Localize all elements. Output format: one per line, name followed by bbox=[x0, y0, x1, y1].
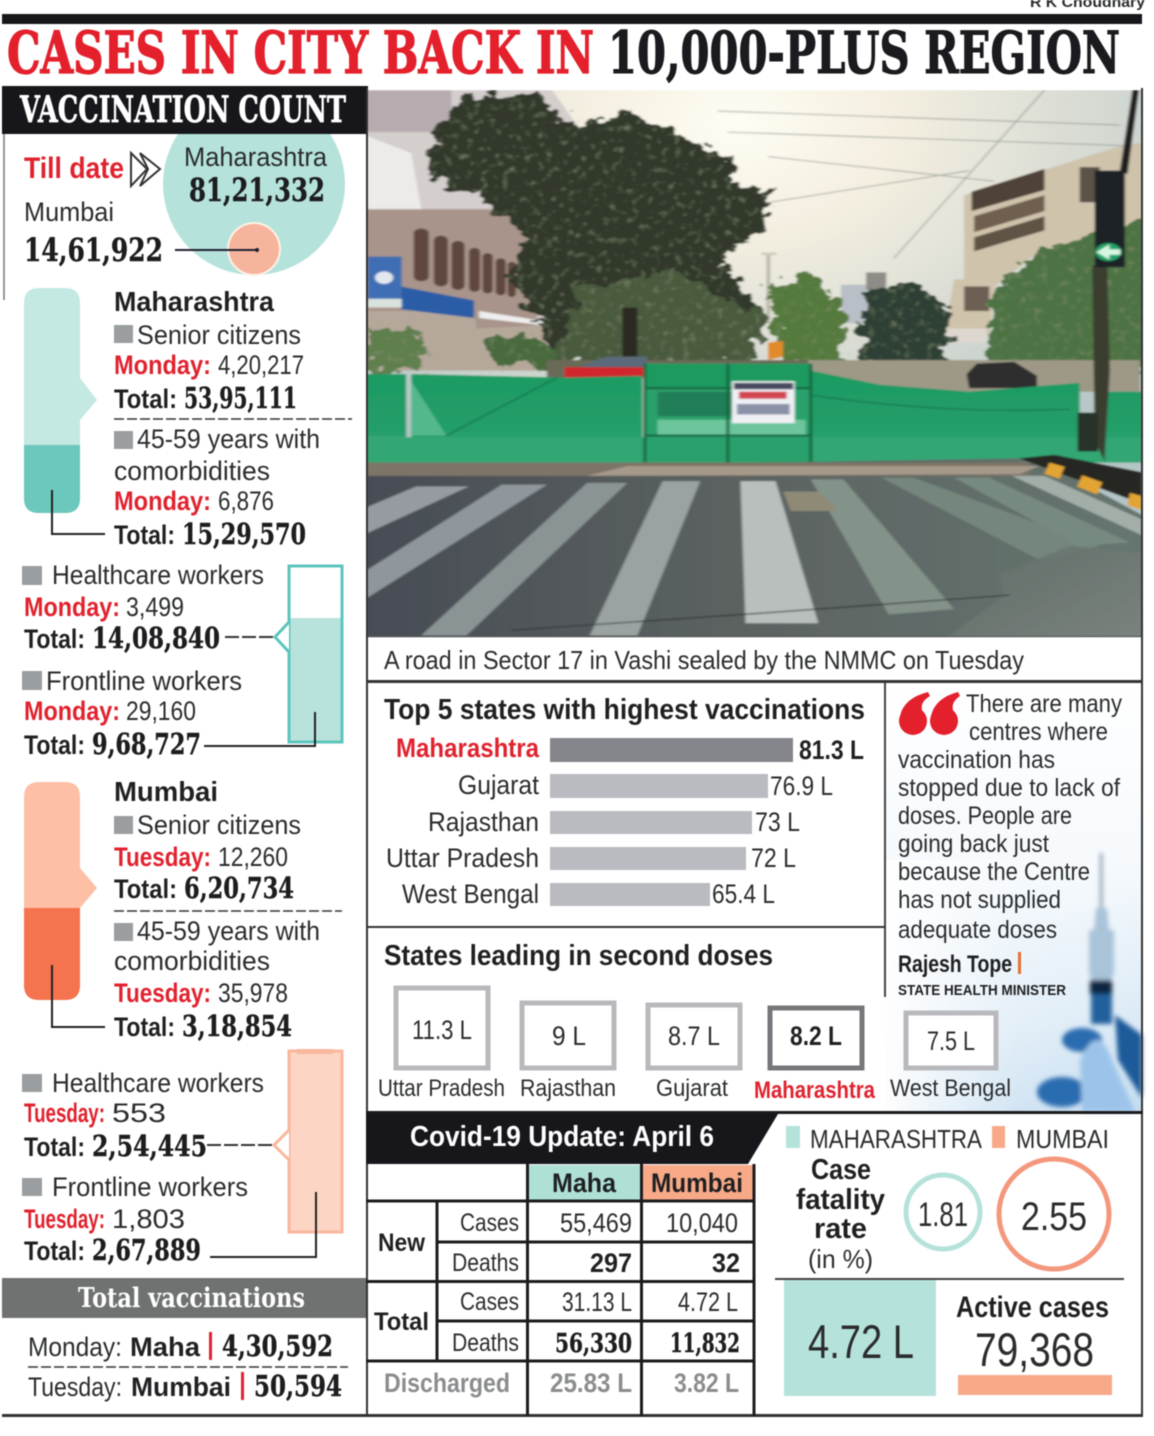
table: Covid-19 update: 11,832 bbox=[670, 1329, 740, 1359]
text: Mumbai workers bbox=[22, 1068, 264, 1267]
table: Covid-19 update: 55,469 bbox=[560, 1208, 632, 1238]
text: Mumbai workers: Healthcare workers bbox=[52, 1068, 264, 1098]
text: Maharashtra senior citizens and comorbidities bbox=[114, 286, 352, 551]
bubble chart: till date totals: Till date bbox=[24, 152, 124, 185]
bar chart: top 5 states: 65.4 L bbox=[712, 879, 775, 909]
total vaccinations: Total vaccinations bbox=[78, 1283, 305, 1314]
table: Covid-19 update: Maha bbox=[552, 1168, 617, 1198]
icon: quotation marks bbox=[899, 692, 960, 735]
table heading: Covid-19 Update: April 6 bbox=[410, 1121, 714, 1153]
text: Mumbai senior citizens and comorbidities: 35,978 bbox=[218, 978, 288, 1008]
table: Covid-19 update: Cases bbox=[460, 1288, 519, 1316]
table: Covid-19 update: Cases bbox=[460, 1209, 519, 1237]
text: Maharashtra senior citizens and comorbidities: 53,95,111 bbox=[184, 381, 297, 415]
bar chart: top 5 states: 76.9 L bbox=[770, 771, 833, 801]
total vaccinations bbox=[2, 1278, 366, 1403]
bar chart: top 5 states: Uttar Pradesh bbox=[386, 843, 539, 873]
table: Covid-19 update: 25.83 L bbox=[550, 1368, 632, 1398]
quote: vaccination has bbox=[898, 746, 1055, 774]
title: CASES IN CITY BACK IN bbox=[7, 19, 594, 87]
heading: vaccination count bbox=[2, 86, 368, 134]
text: Mumbai senior citizens and comorbidities: Mumbai bbox=[114, 776, 218, 807]
text: Maharashtra senior citizens and comorbidities: Senior citizens bbox=[137, 320, 301, 350]
text: Mumbai senior citizens and comorbidities: Senior citizens bbox=[137, 810, 301, 840]
chart: states leading in second doses: Rajasthan bbox=[520, 1075, 616, 1102]
text: Mumbai senior citizens and comorbidities: 12,260 bbox=[218, 842, 288, 872]
chart: states leading in second doses: 8.2 L bbox=[790, 1021, 842, 1051]
bubble chart: till date totals: 81,21,332 bbox=[189, 171, 325, 209]
text: Maharashtra workers: 3,499 bbox=[126, 592, 184, 622]
total vaccinations: Maha bbox=[130, 1332, 201, 1362]
bar chart: top 5 states: 72 L bbox=[751, 843, 796, 873]
text: Maharashtra senior citizens and comorbidities: Maharashtra bbox=[114, 286, 274, 317]
quote: STATE HEALTH MINISTER bbox=[898, 982, 1066, 999]
table: Covid-19 update: 32 bbox=[712, 1248, 740, 1278]
table: Covid-19 update: 56,330 bbox=[555, 1329, 632, 1359]
table: Covid-19 update bbox=[366, 1114, 778, 1416]
case fatality rate: 1.81 bbox=[918, 1196, 968, 1234]
table: Covid-19 update: 4.72 L bbox=[678, 1287, 738, 1317]
text: Maharashtra senior citizens and comorbidities: 45-59 years with bbox=[137, 424, 320, 454]
text: Maharashtra workers: Monday: bbox=[24, 696, 120, 726]
text: Mumbai workers: Tuesday: bbox=[24, 1204, 105, 1234]
table: Covid-19 update: Discharged bbox=[384, 1368, 510, 1398]
text: Maharashtra senior citizens and comorbidities: Total: bbox=[114, 384, 177, 414]
text: Mumbai workers: Total: bbox=[24, 1236, 85, 1266]
text: Maharashtra workers: Healthcare workers bbox=[52, 560, 264, 590]
text: Maharashtra workers: Total: bbox=[24, 624, 85, 654]
chart: states leading in second doses: 8.7 L bbox=[668, 1021, 720, 1051]
active cases bbox=[784, 1280, 1112, 1396]
legend bbox=[786, 1124, 1109, 1154]
text: Maharashtra workers bbox=[22, 560, 264, 761]
total vaccinations: Tuesday: bbox=[28, 1372, 122, 1402]
legend: MUMBAI bbox=[1016, 1124, 1109, 1154]
chart: states leading in second doses: 7.5 L bbox=[927, 1026, 975, 1056]
text: Mumbai senior citizens and comorbidities: comorbidities bbox=[114, 946, 270, 976]
text: Maharashtra senior citizens and comorbidities: Monday: bbox=[114, 350, 211, 380]
text: Mumbai workers: 2,67,889 bbox=[92, 1233, 201, 1267]
quote bbox=[898, 690, 1122, 999]
chart: states leading in second doses: 9 L bbox=[552, 1021, 586, 1051]
text: Maharashtra senior citizens and comorbidities: 4,20,217 bbox=[218, 350, 304, 380]
thermometer: Maharashtra bbox=[24, 288, 105, 534]
caption: A road in Sector 17 in Vashi sealed by the NMMC on Tuesday bbox=[384, 645, 1024, 675]
total vaccinations: 4,30,592 bbox=[222, 1329, 333, 1363]
text: Mumbai senior citizens and comorbidities: Tuesday: bbox=[114, 978, 211, 1008]
text: Maharashtra workers: Frontline workers bbox=[46, 666, 242, 696]
bar chart: top 5 states: West Bengal bbox=[402, 879, 539, 909]
table: Covid-19 update: 10,040 bbox=[666, 1208, 738, 1238]
table: Covid-19 update: New bbox=[378, 1229, 426, 1257]
table: Covid-19 update: Mumbai bbox=[651, 1168, 743, 1198]
bar chart: top 5 states: Gujarat bbox=[458, 770, 539, 800]
text: Mumbai workers: 2,54,445 bbox=[92, 1129, 207, 1163]
case fatality rate: rate bbox=[814, 1213, 867, 1245]
bubble chart: till date totals: Maharashtra bbox=[184, 142, 328, 172]
text: Mumbai senior citizens and comorbidities: Tuesday: bbox=[114, 842, 211, 872]
top black bar bbox=[2, 14, 1142, 24]
quote: There are many bbox=[966, 690, 1122, 718]
quote: Rajesh Tope bbox=[898, 951, 1012, 978]
text: Maharashtra workers: Total: bbox=[24, 730, 85, 760]
total vaccinations: Mumbai bbox=[131, 1372, 231, 1402]
case fatality rate: 2.55 bbox=[1021, 1195, 1087, 1239]
table: Covid-19 update: Deaths bbox=[452, 1249, 519, 1277]
bar chart: top 5 states: 73 L bbox=[755, 807, 800, 837]
quote: because the Centre bbox=[898, 858, 1090, 886]
column chart: Maharashtra workers bbox=[204, 566, 342, 746]
table: Covid-19 update: Deaths bbox=[452, 1329, 519, 1357]
text: Maharashtra workers: 14,08,840 bbox=[92, 621, 220, 655]
active cases: 79,368 bbox=[975, 1323, 1094, 1376]
text: Mumbai senior citizens and comorbidities: 45-59 years with bbox=[137, 916, 320, 946]
active cases: 4.72 L bbox=[808, 1315, 914, 1368]
text: Mumbai workers: Tuesday: bbox=[24, 1098, 105, 1128]
table heading bbox=[366, 1114, 778, 1164]
photo: sealed road in Vashi bbox=[366, 90, 1154, 640]
bubble chart: till date totals: 14,61,922 bbox=[24, 231, 163, 269]
text: Mumbai workers: 553 bbox=[112, 1098, 166, 1128]
table: Covid-19 update: 31.13 L bbox=[562, 1287, 632, 1317]
bar chart: top 5 states: Maharashtra bbox=[396, 733, 540, 763]
chart: states leading in second doses: Uttar Pradesh bbox=[378, 1075, 505, 1102]
bar chart: top 5 states: 81.3 L bbox=[799, 735, 864, 765]
quote: going back just bbox=[898, 830, 1049, 858]
icon: syringe and hand bbox=[1037, 853, 1142, 1112]
chart: states leading in second doses: Gujarat bbox=[656, 1075, 728, 1102]
thermometer: Mumbai bbox=[24, 782, 105, 1027]
total vaccinations: 50,594 bbox=[254, 1369, 342, 1403]
text: Maharashtra workers: 9,68,727 bbox=[92, 727, 201, 761]
bar chart: top 5 states: Top 5 states with highest vaccinations bbox=[384, 694, 865, 726]
chart: states leading in second doses: West Bengal bbox=[890, 1075, 1011, 1102]
text: Mumbai senior citizens and comorbidities: 3,18,854 bbox=[182, 1009, 292, 1043]
text: Mumbai senior citizens and comorbidities: Total: bbox=[114, 1012, 175, 1042]
chart: states leading in second doses: 11.3 L bbox=[412, 1015, 472, 1045]
chart: states leading in second doses bbox=[378, 940, 1011, 1104]
heading: vaccination count: VACCINATION COUNT bbox=[19, 89, 346, 131]
quote: adequate doses bbox=[898, 916, 1057, 944]
bar chart: top 5 states: Rajasthan bbox=[428, 807, 539, 837]
table: Covid-19 update: Total bbox=[374, 1308, 429, 1336]
panel: vaccination count bbox=[2, 86, 368, 1416]
case fatality rate: fatality bbox=[796, 1184, 885, 1216]
text: Mumbai senior citizens and comorbidities bbox=[114, 776, 342, 1043]
text: Maharashtra senior citizens and comorbidities: comorbidities bbox=[114, 456, 270, 486]
text: Maharashtra workers: Monday: bbox=[24, 592, 120, 622]
table: Covid-19 update: 3.82 L bbox=[674, 1368, 739, 1398]
text: Maharashtra senior citizens and comorbidities: 15,29,570 bbox=[182, 517, 306, 551]
active cases: Active cases bbox=[956, 1291, 1109, 1324]
table: Covid-19 update: 297 bbox=[590, 1248, 632, 1278]
bar chart: top 5 states bbox=[384, 694, 865, 909]
case fatality rate bbox=[796, 1154, 1109, 1274]
text: Maharashtra workers: 29,160 bbox=[126, 696, 196, 726]
text: Mumbai senior citizens and comorbidities: Total: bbox=[114, 874, 177, 904]
case fatality rate: (in %) bbox=[808, 1244, 873, 1274]
case fatality rate: Case bbox=[811, 1154, 871, 1186]
quote: doses. People are bbox=[898, 802, 1072, 830]
quote: centres where bbox=[969, 718, 1108, 746]
quote: stopped due to lack of bbox=[898, 774, 1120, 802]
legend: MAHARASHTRA bbox=[810, 1124, 983, 1154]
total vaccinations: Monday: bbox=[28, 1332, 122, 1362]
bubble chart: till date totals: Mumbai bbox=[24, 197, 114, 227]
column chart: Mumbai workers bbox=[207, 1049, 342, 1257]
text: Mumbai workers: Frontline workers bbox=[52, 1172, 248, 1202]
text: Mumbai senior citizens and comorbidities: 6,20,734 bbox=[184, 871, 294, 905]
chart: states leading in second doses: States leading in second doses bbox=[384, 940, 773, 972]
text: Maharashtra senior citizens and comorbidities: Monday: bbox=[114, 486, 211, 516]
text: Mumbai workers: 1,803 bbox=[112, 1204, 185, 1234]
panel: quote background with syringe bbox=[886, 683, 1142, 1112]
quote: has not supplied bbox=[898, 886, 1061, 914]
chart: states leading in second doses: Maharashtra bbox=[754, 1077, 876, 1104]
text: Mumbai workers: Total: bbox=[24, 1132, 85, 1162]
text: Maharashtra senior citizens and comorbidities: 6,876 bbox=[218, 486, 274, 516]
bubble chart: till date totals bbox=[24, 134, 345, 276]
text: Maharashtra senior citizens and comorbidities: Total: bbox=[114, 520, 175, 550]
